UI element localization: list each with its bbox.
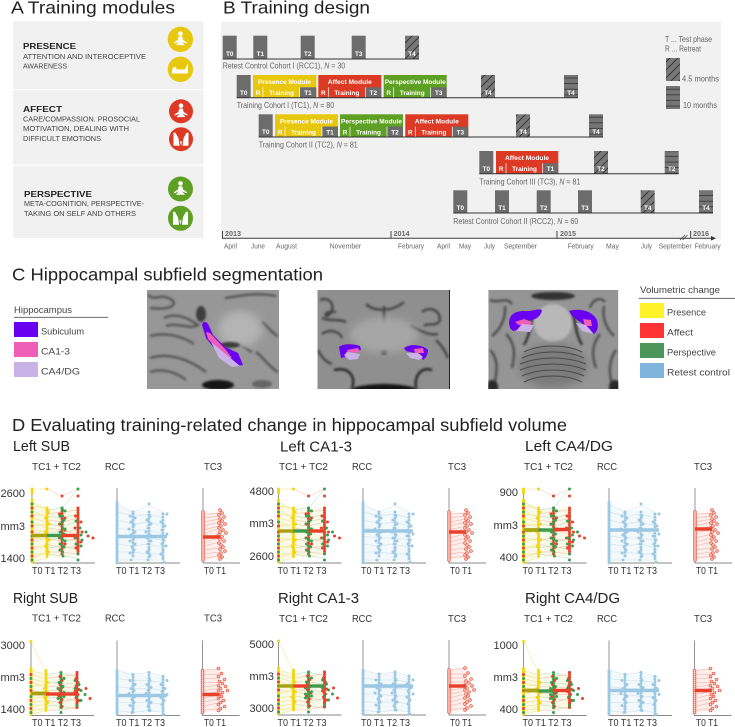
chart block: Right CA1-3: RCC (352, 613, 372, 625)
chart block: Left CA4/DG: T0 T1 (696, 565, 718, 577)
chart block: Right CA4/DG: 1000 (494, 640, 518, 652)
timeline axis: April (224, 242, 237, 250)
chart block: Left CA1-3: T0 T1 T2 T3 (361, 565, 410, 577)
legend: test phase key: 4.5 months (682, 74, 719, 84)
timeline axis: August (276, 242, 297, 250)
chart block: Left CA4/DG: mm3 (494, 520, 518, 532)
chart block: Left CA4/DG: Left CA4/DG (525, 439, 613, 455)
legend: hippocampus: Subiculum (41, 326, 84, 336)
chart block: Left CA1-3: 4800 (250, 486, 274, 498)
timeline axis: 2015 (560, 229, 576, 238)
chart block: Left CA4/DG: TC1 + TC2 (524, 461, 573, 473)
cohort: TC1: Training (269, 90, 294, 97)
cohort: TC1: R (386, 90, 391, 97)
module: presence (23, 27, 193, 82)
timeline axis: November (330, 242, 362, 250)
legend: test phase key: R ... Retreat (665, 44, 702, 54)
cohort: RCC2: T3 (581, 205, 589, 212)
chart block: Left SUB: 2600 (1, 488, 25, 500)
chart block: Left SUB: T0 T1 (204, 565, 226, 577)
cohort: TC2: Training (291, 129, 316, 136)
cohort: TC3: T1 (547, 166, 555, 173)
cohort: TC2: Training Cohort II (TC2), N = 81 (259, 140, 358, 149)
chart block: Left CA4/DG: 400 (500, 552, 518, 564)
cohort: TC2: T0 (262, 129, 270, 136)
legend: hippocampus: CA1-3 (41, 346, 70, 356)
chart block: Left SUB: Left SUB (13, 439, 70, 455)
cohort: RCC2: T4 (702, 205, 710, 212)
chart block: Left CA1-3: Left CA1-3 (280, 440, 352, 456)
cohort: TC3: Training Cohort III (TC3), N = 81 (479, 178, 581, 186)
cohort: RCC1 (223, 36, 419, 71)
chart block: Left CA4/DG: TC3 (694, 461, 712, 473)
divider (13, 89, 204, 91)
MRI: oblique coronal slice through brainstem (488, 290, 618, 389)
chart block: Right CA4/DG: Right CA4/DG (525, 591, 620, 607)
timeline axis: February (695, 242, 721, 250)
panel B: training design (221, 0, 721, 250)
cohort: TC2: T3 (457, 129, 464, 136)
chart block: Right CA1-3 (250, 591, 486, 727)
timeline axis: 2014 (394, 229, 410, 238)
overlay: hippocampus segmentation (202, 322, 243, 367)
chart block: Left CA4/DG: RCC (597, 461, 617, 473)
cohort: TC1: T1 (304, 90, 312, 97)
timeline axis: May (459, 242, 471, 250)
module: affect: MOTIVATION, DEALING WITH (23, 124, 129, 133)
chart block: Left CA1-3: T0 T1 (450, 565, 472, 577)
cohort: TC1: Affect Module (328, 79, 372, 86)
cohort: RCC1: T0 (226, 51, 234, 58)
cohort: RCC2 (453, 190, 713, 226)
chart block: Left CA4/DG (494, 439, 732, 577)
module: affect: DIFFICULT EMOTIONS (23, 134, 101, 143)
module: perspective: TAKING ON SELF AND OTHERS (24, 209, 136, 218)
cohort: RCC1: T4 (408, 51, 416, 58)
timeline axis: July (641, 242, 652, 250)
legend: volumetric change: Volumetric change (640, 285, 720, 295)
chart block: Right SUB: RCC (105, 613, 125, 625)
chart block: Left CA1-3 (250, 440, 486, 577)
cohort: TC3: T0 (483, 166, 490, 173)
cohort: TC1: T3 (435, 90, 443, 97)
heading C: C Hippocampal subfield segmentation (12, 265, 323, 285)
chart block: Right SUB: TC3 (204, 613, 222, 625)
MRI: sagittal slice (147, 290, 279, 389)
chart block: Right CA1-3: Right CA1-3 (278, 591, 359, 607)
chart block: Left SUB: T0 T1 T2 T3 (116, 565, 165, 577)
cohort: TC1: Training Cohort I (TC1), N = 80 (237, 101, 335, 110)
cohort: RCC1: Retest Control Cohort I (RCC1), N = 30 (223, 62, 346, 71)
module: perspective: META-COGNITION, PERSPECTIVE- (24, 199, 145, 208)
cohort: TC1: Perspective Module (385, 79, 446, 86)
overlay: right hippocampus (569, 310, 598, 334)
legend: test phase key (665, 35, 719, 110)
chart block: Left CA1-3: TC3 (448, 461, 466, 473)
cohort: TC3: R (499, 166, 504, 173)
cohort: RCC1: T3 (355, 51, 363, 58)
module: affect: CARE/COMPASSION. PROSOCIAL (23, 114, 140, 124)
chart block: Right CA4/DG: mm3 (494, 672, 518, 684)
legend: volumetric change: Retest control (667, 368, 730, 378)
module: presence: ATTENTION AND INTEROCEPTIVE (23, 52, 146, 61)
chart block: Right CA1-3: mm3 (250, 671, 274, 683)
panel C: hippocampal subfield segmentation (12, 265, 735, 400)
timeline axis (222, 229, 721, 250)
chart block: Right CA4/DG (494, 591, 732, 727)
cohort: TC2: Perspective Module (341, 118, 402, 125)
panel background (221, 22, 721, 239)
chart block: Left CA1-3: TC1 + TC2 (279, 461, 328, 473)
timeline axis: April (437, 242, 450, 250)
chart block: Right SUB: mm3 (1, 672, 25, 684)
cohort: TC1: Training (334, 90, 359, 97)
module: affect (23, 99, 193, 151)
chart block: Right SUB (1, 591, 240, 727)
legend: volumetric change: Presence (667, 308, 706, 318)
cohort: TC1: T4 (484, 90, 492, 97)
cohort: TC2: Training (356, 129, 381, 136)
chart block: Left SUB: RCC (105, 461, 125, 473)
cohort: TC1: T2 (370, 90, 377, 97)
chart block: Left CA1-3: 2600 (250, 551, 274, 563)
chart block: Right CA1-3: 3000 (250, 703, 274, 715)
module: presence: AWARENESS (23, 62, 67, 70)
heading D: D Evaluating training-related change in hippocampal subfield volume (12, 415, 567, 435)
overlay: left hippocampus (509, 309, 542, 332)
cohort: TC3: T2 (668, 166, 676, 173)
cohort: TC1: T4 (567, 90, 575, 97)
legend: test phase key: 10 months (683, 101, 717, 110)
panel A: training modules (11, 0, 204, 238)
chart block: Left SUB: T0 T1 T2 T3 (32, 565, 81, 577)
cohort: TC1: Training (400, 90, 425, 97)
chart block: Right SUB: 1400 (1, 704, 25, 716)
chart block: Right SUB: TC1 + TC2 (32, 613, 81, 625)
chart block: Right CA1-3: TC1 + TC2 (279, 613, 328, 625)
chart block: Left CA1-3: T0 T1 T2 T3 (278, 565, 327, 577)
chart block: Right CA1-3: 5000 (250, 639, 274, 651)
cohort: TC2: Presence Module (280, 118, 333, 125)
chart block: Left CA1-3: RCC (352, 461, 372, 473)
legend: hippocampus: CA4/DG (41, 366, 80, 376)
cohort: RCC2: T4 (644, 205, 652, 212)
chart block: Left CA1-3: mm3 (250, 518, 274, 530)
chart block: Right CA4/DG: RCC (597, 613, 617, 625)
cohort: TC2: T4 (519, 129, 527, 136)
cohort: TC3: Training (512, 166, 537, 173)
divider (13, 164, 204, 166)
cohort: RCC2: Retest Control Cohort II (RCC2), N = 60 (453, 217, 579, 226)
timeline axis: 2016 (693, 229, 709, 238)
cohort: TC2: Affect Module (415, 118, 459, 125)
legend: test phase key: T ... Test phase (665, 35, 712, 44)
chart block: Right SUB: 3000 (1, 640, 25, 652)
cohort: TC1: R (256, 90, 261, 97)
chart block: Left SUB (1, 439, 240, 577)
chart block: Right CA4/DG: 400 (500, 704, 518, 716)
cohort: RCC2: T1 (498, 205, 506, 212)
timeline axis: May (606, 242, 619, 250)
module: affect: AFFECT (23, 104, 63, 114)
panel D: evaluating training-related change (1, 415, 732, 727)
cohort: TC3: T2 (597, 166, 605, 173)
chart block: Left SUB: 1400 (1, 553, 25, 565)
cohort: RCC2: T2 (540, 205, 548, 212)
timeline axis: June (251, 242, 265, 250)
timeline axis: 2013 (225, 229, 241, 238)
chart block: Right CA1-3: TC3 (448, 613, 466, 625)
cohort: TC1 (237, 75, 578, 110)
cohort: TC3: Affect Module (505, 155, 549, 162)
chart block: Left CA4/DG: 900 (500, 487, 518, 499)
timeline axis: September (659, 242, 692, 250)
legend: hippocampus (14, 305, 108, 377)
cohort: TC2: Training (421, 129, 446, 136)
cohort: RCC1: T1 (257, 51, 264, 58)
cohort: TC1: R (321, 90, 326, 97)
chart block: Left SUB: TC1 + TC2 (32, 461, 81, 473)
cohort: TC2: R (408, 129, 413, 136)
timeline axis: February (568, 242, 594, 250)
cohort: TC2: T1 (326, 129, 334, 136)
cohort: TC2: R (343, 129, 348, 136)
timeline axis: February (398, 242, 424, 250)
legend: volumetric change: Perspective (667, 348, 716, 358)
legend: hippocampus: Hippocampus (14, 305, 72, 315)
timeline axis: July (484, 242, 495, 250)
chart block: Right CA4/DG: TC3 (694, 613, 712, 625)
cohort: TC3 (479, 151, 679, 186)
MRI: coronal slice (318, 290, 450, 389)
cohort: TC2: R (278, 129, 283, 136)
chart block: Right SUB: Right SUB (13, 591, 78, 607)
legend: volumetric change: Affect (667, 328, 693, 338)
cohort: TC1: T0 (240, 90, 248, 97)
cohort: TC2 (259, 114, 603, 149)
timeline axis: September (504, 242, 538, 250)
chart block: Left SUB: TC3 (204, 461, 222, 473)
module: perspective: PERSPECTIVE (24, 189, 92, 199)
cohort: TC2: T4 (592, 129, 600, 136)
cohort: TC2: T2 (391, 129, 399, 136)
overlay: right hippocampus (404, 345, 428, 360)
cohort: TC1: Presence Module (258, 79, 311, 86)
overlay: left hippocampus (339, 344, 361, 360)
module: perspective (24, 176, 193, 231)
chart block: Left CA4/DG: T0 T1 T2 T3 (608, 565, 657, 577)
chart block: Left CA4/DG: T0 T1 T2 T3 (522, 565, 572, 577)
cohort: RCC2: T0 (457, 205, 464, 212)
legend: volumetric change (639, 285, 735, 378)
chart block: Right CA4/DG: TC1 + TC2 (524, 613, 573, 625)
chart block: Left SUB: mm3 (1, 521, 25, 533)
panel background (13, 21, 204, 238)
module: presence: PRESENCE (23, 41, 76, 51)
cohort: RCC1: T2 (304, 51, 312, 58)
